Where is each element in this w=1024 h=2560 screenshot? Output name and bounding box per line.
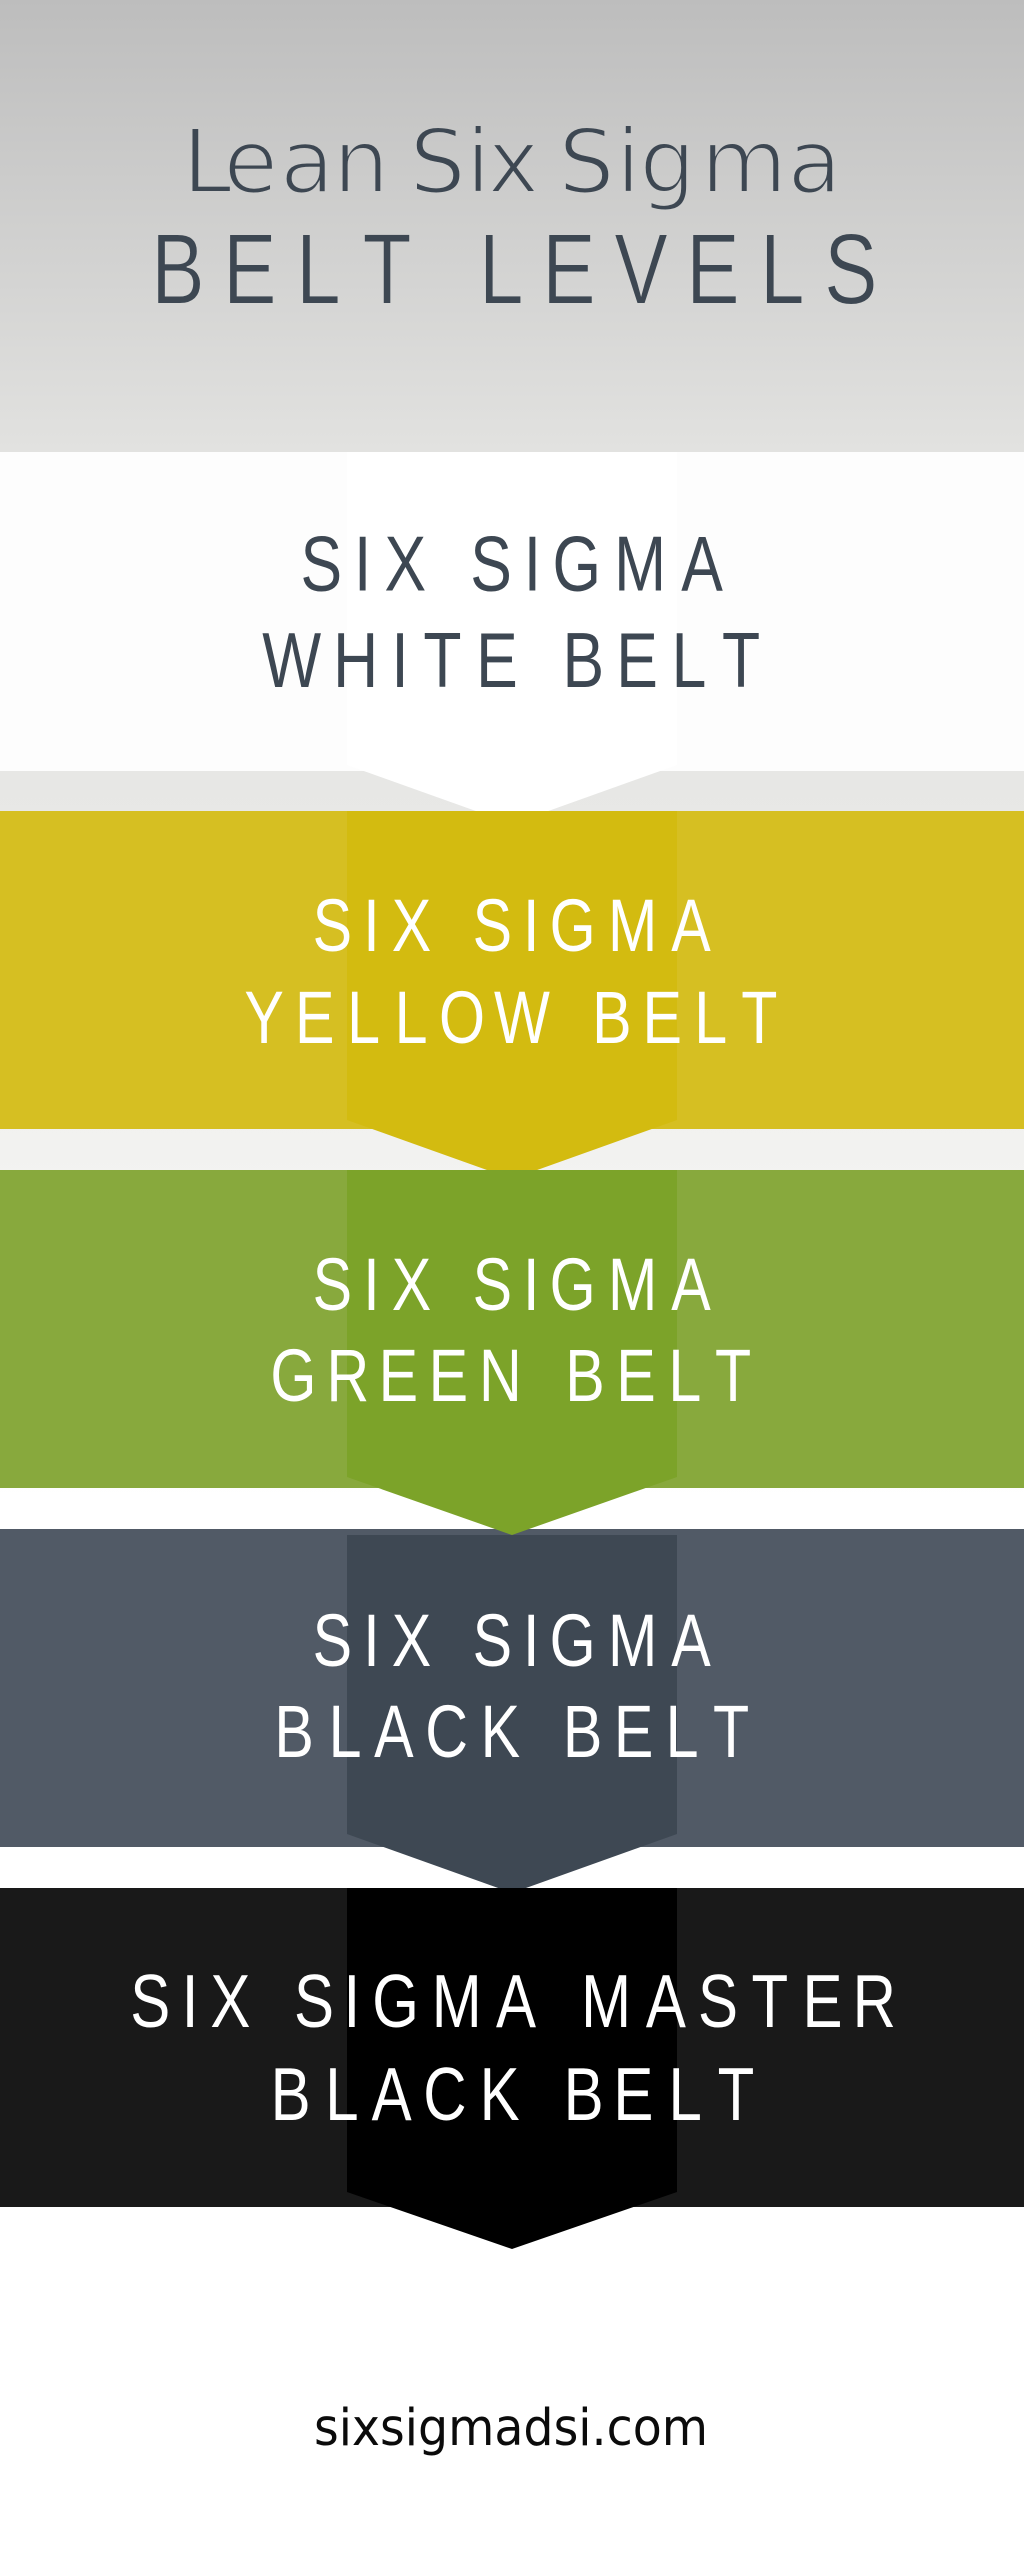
- green belt label: [270, 1244, 751, 1418]
- panel: white belt: [0, 452, 1024, 824]
- title line: Lean Six Sigma: Lean Six Sigma: [182, 110, 842, 214]
- yellow belt label: [244, 885, 777, 1060]
- green band: [0, 1170, 1024, 1488]
- black belt label: BLACK BELT: [274, 1691, 749, 1774]
- master black belt label: [130, 1961, 896, 2137]
- master black belt label: BLACK BELT: [271, 2054, 754, 2137]
- yellow chevron: [347, 811, 677, 1179]
- panel: yellow belt: [0, 811, 1024, 1179]
- footer website: sixsigmadsi.com: [314, 2399, 708, 2458]
- black chevron: [347, 1888, 677, 2249]
- panel: master black belt: [0, 1888, 1024, 2249]
- white belt label: WHITE BELT: [262, 616, 760, 704]
- title: [151, 110, 877, 326]
- panel: gray black belt: [0, 1529, 1024, 1893]
- black belt label: [274, 1600, 749, 1774]
- white chevron: [347, 452, 677, 824]
- yellow band: [0, 811, 1024, 1129]
- black band: [0, 1888, 1024, 2207]
- yellow belt label: YELLOW BELT: [244, 977, 777, 1060]
- green belt label: SIX SIGMA: [313, 1244, 711, 1327]
- yellow belt label: SIX SIGMA: [313, 885, 711, 968]
- title line: BELT LEVELS: BELT LEVELS: [151, 214, 877, 326]
- panel: green belt: [0, 1170, 1024, 1535]
- gray band: [0, 1529, 1024, 1847]
- green chevron: [347, 1170, 677, 1535]
- green belt label: GREEN BELT: [270, 1335, 751, 1418]
- white band: [0, 452, 1024, 771]
- white belt label: [262, 520, 760, 704]
- black belt label: SIX SIGMA: [313, 1600, 711, 1683]
- white belt label: SIX SIGMA: [300, 520, 723, 607]
- gray chevron: [347, 1535, 677, 1893]
- master black belt label: SIX SIGMA MASTER: [130, 1961, 896, 2044]
